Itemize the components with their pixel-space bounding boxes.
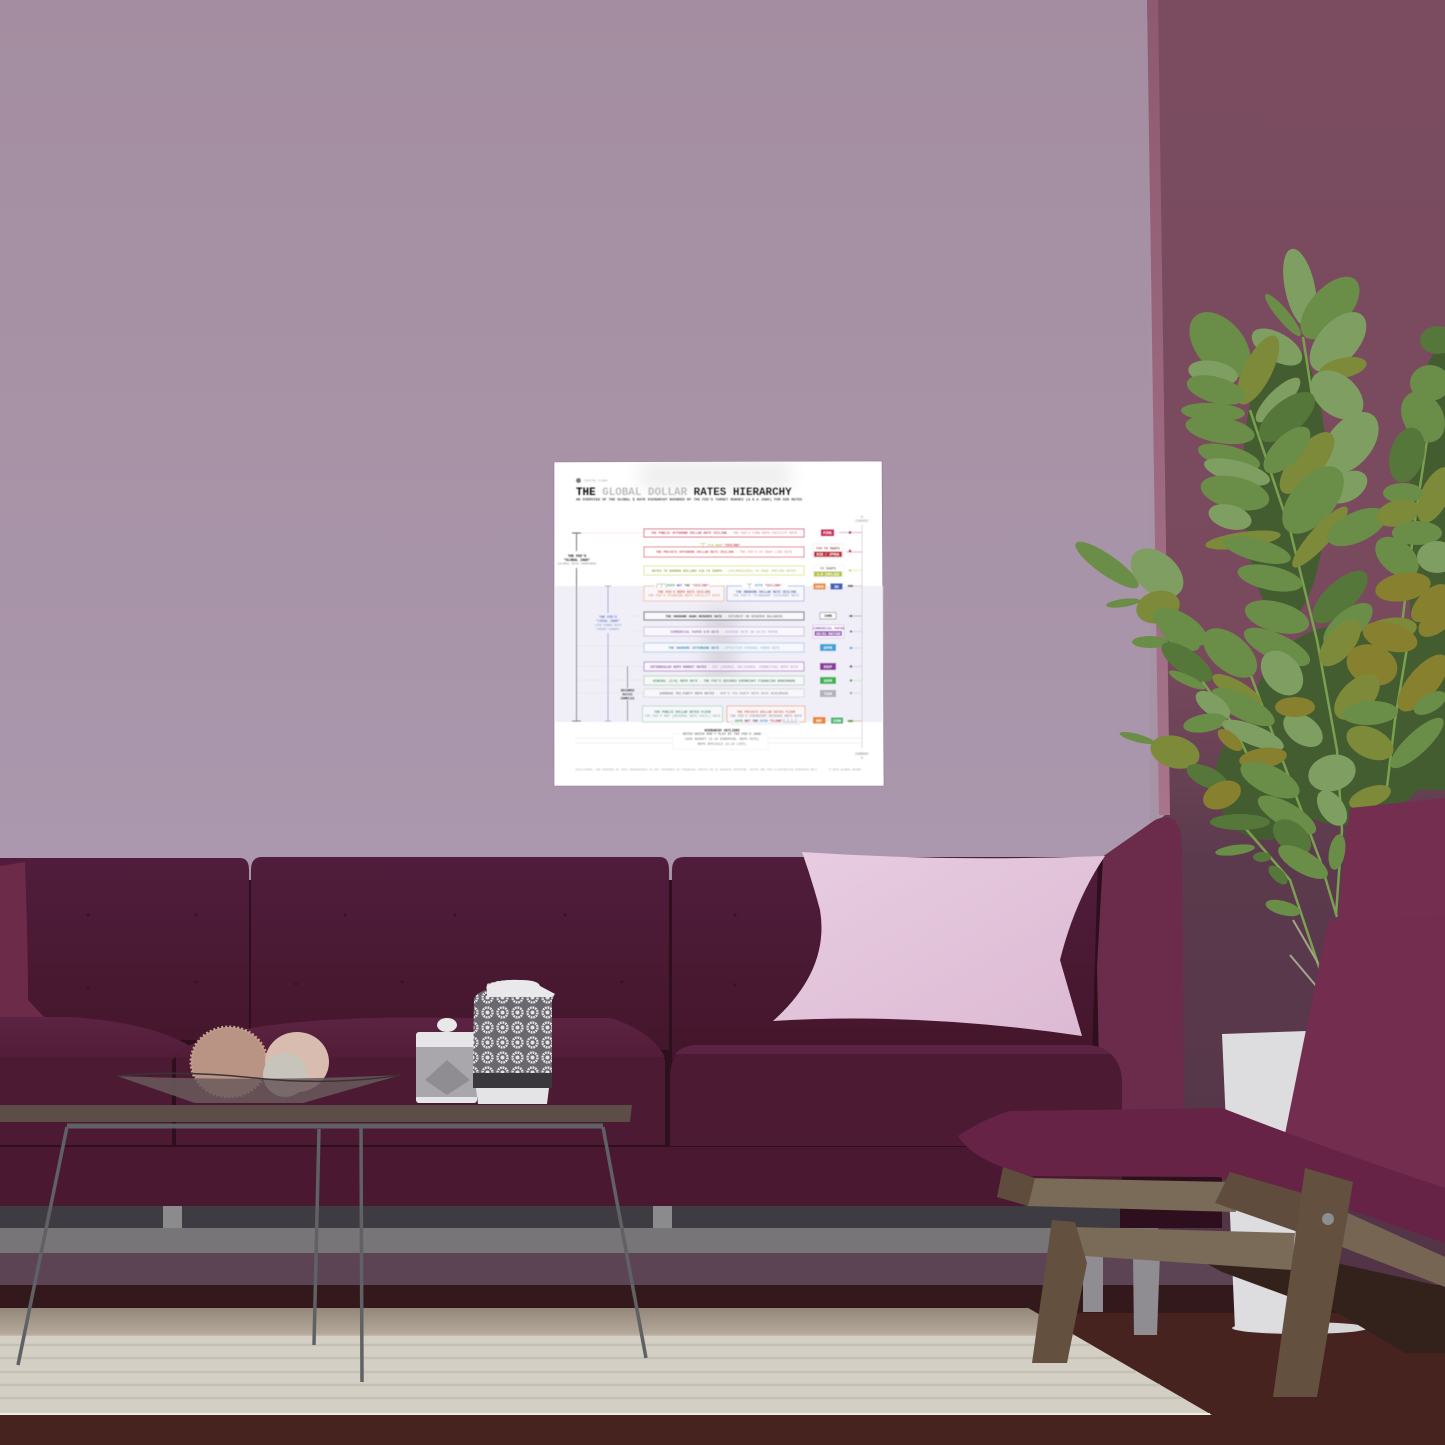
sofa legs [163,1206,672,1230]
main leg [1273,1168,1353,1397]
panel: private dollar floor [727,706,805,725]
glass bowl [117,1073,401,1103]
rear sofa legs [1083,1253,1160,1335]
lower rail [1070,1227,1295,1270]
leaves: right branch [1368,326,1445,643]
tag: commercial paper: COMMERCIAL PAPER [813,626,844,630]
back cushion left [0,858,249,1040]
table top [0,1105,632,1122]
seat cushion left [0,1017,190,1145]
tag: EFFR [820,644,862,651]
back cushion middle [251,857,669,1050]
row: interdealer repo [644,662,804,671]
lavender band [555,586,883,722]
label: secured rates complex: SECURED [621,688,634,692]
label: global jaws: (GLOBAL RATE CORRIDOR) [557,562,597,566]
leaves: left branch [1070,535,1213,654]
rug [0,1308,1212,1415]
tag: commercial paper: 90/91 MATCHE [816,632,841,637]
patterned vase [473,980,555,1104]
row: private offshore ceiling [644,547,804,557]
leaves: lower layer [1177,246,1418,655]
label: secured rates complex [621,688,634,700]
axis: scale line [855,515,869,760]
tag: GCF [820,663,862,670]
throw pillow left [0,862,45,1018]
panel: fed repo rate ceiling: THE FED'S REPO RATE CEILING [658,590,710,594]
left leg [1032,1220,1087,1363]
axis: scale line: % [861,515,863,519]
front rail end [997,1167,1035,1206]
label: local jaws: "LOCAL JAWS" [596,619,620,623]
label: global jaws [557,554,597,566]
seat top right [675,1045,1110,1054]
plant stems [1180,337,1427,970]
note: ceiling marker [700,543,741,548]
axis: scale line: CURRENT [855,519,869,523]
tag: IORB: IORB [824,614,832,618]
row: tri-party repo: AVERAGE TRI-PARTY REPO RATES - OFR'S TRI-PARTY REPO RATE BENCHMARK [660,692,788,696]
row: FX swaps [644,566,804,575]
tag: FED FX swaps [813,544,862,558]
axis: scale line: CURRENT [855,752,869,756]
sofa backdrop [0,880,1222,1228]
wall corner strip [1147,0,1170,815]
lounge chair under frame [1200,1255,1445,1353]
label: global jaws: "GLOBAL JAWS" [564,558,590,563]
note: ceiling marker: O/N SWAP "CEILING" [708,543,741,547]
baseboard [0,1285,1445,1313]
coral spheres [191,1027,329,1097]
tag: FX swaps: FX SWAPS [820,566,836,570]
table legs [18,1126,646,1382]
arm shadow [1070,858,1103,1060]
bolt [1322,1213,1334,1225]
sofa [0,817,1222,1335]
button tufts [86,914,736,990]
row: general repo [644,676,804,685]
hierarchy outliers [575,728,862,750]
plant pot [1222,1031,1368,1334]
tag: EFFR: EFFR [824,647,833,651]
logo [576,478,608,483]
poster smudges [640,462,790,680]
lounge chair seat [958,1108,1445,1243]
tag: commercial paper [813,625,862,638]
panel: fed repo rate ceiling: SOFR NOT THE "CEILING" [667,584,709,588]
footer disclaimer: DISCLAIMER: THE PURPOSE OF THIS INFOGRAPHIC IS NOT INTENDED AS FINANCIAL ADVICE OR TO SUGGEST ANYTHING. DATES ARE FOR ILLUSTRATIVE PURPOSES ONLY [576,768,818,772]
tags: RRP and IOER floor: IORB [833,720,841,724]
row: bank reserve rate: THE ONSHORE BANK RESERVE RATE - INTEREST ON RESERVE BALANCES [665,614,783,618]
sofa arm [1095,817,1184,1120]
poster [554,461,884,786]
tag: FIMA [821,530,862,536]
tags: SRFR and DW: SRFR [815,586,825,590]
tags: SRFR and DW [814,584,862,590]
wall under sofa [0,1253,1240,1289]
tags: SRFR and DW: DW [834,586,839,590]
panel: onshore dollar ceiling: EFFR "CEILING" [755,584,782,588]
tag: FX swaps: 3-M IMPLIED [817,573,839,577]
label: secured rates complex: RATES [623,692,632,696]
panel: public dollar floor [642,706,722,722]
label: local jaws: THE FED'S [599,615,617,619]
dense foliage shadow [1215,340,1445,840]
tag: FIMA: FIMA [823,532,833,536]
tag: FED FX swaps: ECB / JPMAA [817,552,840,558]
footer credit: © 2024 GLOBAL MACRO [829,768,861,772]
hierarchy outliers: HIERARCHY OUTLIERS [704,728,740,732]
row: commercial paper [644,627,804,636]
label: local jaws: (FED FUNDS RATE [594,623,622,627]
panel: private dollar floor: SOFR NOT THE EFFR "FLOOR" [735,719,783,723]
row: tri-party repo [644,689,804,697]
axis: scale line: % [861,756,863,760]
panel: private dollar floor: THE FED'S OVERNIGHT REVERSE REPO RATE [730,714,802,718]
label: local jaws [594,615,622,631]
front rail [1026,1178,1236,1212]
left bracket: global jaws [572,533,643,721]
back cushion right [672,857,1098,1060]
left bracket: local jaws [605,586,611,721]
small jar [416,1018,477,1103]
lounge chair frame [997,1167,1445,1397]
rail [0,1228,1158,1253]
row: general repo: GENERAL (O/N) REPO RATE - THE FED'S SECURED OVERNIGHT FINANCING BENCHMARK [653,679,795,683]
label: secured rates complex: COMPLEX [621,696,634,700]
tag: FED FX swaps: FED FX SWAPS [816,546,840,550]
title: THE GLOBAL DOLLAR RATES HIERARCHY [576,487,792,499]
seat top middle [176,1017,665,1057]
panel: private dollar floor: THE PRIVATE DOLLAR RATES FLOOR [737,710,795,714]
panel: public dollar floor: THE PUBLIC DOLLAR RATES FLOOR [654,710,711,714]
tags: RRP and IOER floor: RRP [816,720,822,724]
side rail [1215,1172,1302,1232]
pale lower stems [1290,920,1318,987]
subtitle: AN OVERVIEW OF THE GLOBAL $ RATE HIERARCHY BOUNDED BY THE FED'S TARGET RANGES (A.K.A JAWS) FOR USD RATES [576,498,803,502]
panel: onshore dollar ceiling: THE FED'S "STANDARD" DISCOUNT RATE [733,594,799,598]
back rail [1342,1213,1445,1287]
sofa shadow [0,1206,1120,1228]
seat cushion middle [176,1017,665,1145]
floor [0,1313,1445,1445]
row: commercial paper: COMMERCIAL PAPER O/N RATE - AVERAGE RATE ON 90/91 PAPER [670,630,778,634]
tag: TGCR [820,690,862,697]
guide lines [577,616,644,693]
row: public offshore ceiling: THE PUBLIC OFFSHORE DOLLAR RATE CEILING - THE FED'S FIMA REPO FACILITY RATE [651,531,797,535]
row: public offshore ceiling [644,529,804,537]
tags: RRP and IOER floor [813,717,862,724]
big pillow [773,852,1105,1036]
row: private offshore ceiling: THE PRIVATE OFFSHORE DOLLAR RATE CEILING - THE FED'S FX SWAP LINE RATE [656,550,792,554]
lounge chair back [1285,916,1445,1200]
wall: left lilac [0,0,1150,870]
left bracket: secured rates complex [626,666,628,721]
hierarchy outliers: REPO SPECIALS (G-10 LIST) [698,742,746,746]
plant [1070,246,1445,987]
sofa base [0,1147,1122,1206]
row: bank reserve rate [644,612,804,620]
row: interdealer repo: INTERDEALER REPO MARKET RATES - GCF (SOURCE, DELIVERED, CONNECTED) REPO RATE [650,665,798,669]
logo: CAPITAL FLOWS [584,480,608,482]
panel: onshore dollar ceiling [727,583,804,601]
tag: SOFR [820,677,862,684]
row: interbank [644,643,804,652]
panel: onshore dollar ceiling: THE ONSHORE DOLLAR RATE CEILING [736,590,796,594]
tag: IORB [820,612,862,619]
hierarchy outliers: CASH BASKET (G-10 EUROPEAN, REPO VOTE) [685,737,759,741]
panel: public dollar floor: THE FED'S RRP (REVERSE REPO FACIL) RATE [644,714,721,718]
label: global jaws: THE FED'S [568,554,586,559]
tag: FX swaps [813,565,862,577]
tag: TGCR: TGCR [824,693,833,697]
wall: right plum [1100,0,1445,1300]
lounge chair headrest [1337,798,1445,923]
label: local jaws: TARGET RANGE) [596,627,620,631]
tag: GCF: DGCF [824,666,832,670]
leaves: lower clump [1119,613,1445,919]
seat top left [0,1017,191,1057]
row: FX swaps: RATES TO BORROW DOLLARS VIA FX SWAPS - CIP(MOSAICED) FX SWAP IMPLIED RATES [652,569,796,573]
panel: fed repo rate ceiling [644,583,724,601]
panel: fed repo rate ceiling: THE FED'S STANDING REPO FACILITY RATE [648,594,720,598]
hierarchy outliers: RATES WHICH DON'T PLAY BY THE FED'S JAWS [683,732,761,736]
seat cushion right [670,1045,1122,1146]
row: interbank: THE ONSHORE INTERBANK RATE - EFFECTIVE FEDERAL FUNDS RATE [668,646,780,650]
tag: SOFR: SOFR [824,680,833,684]
